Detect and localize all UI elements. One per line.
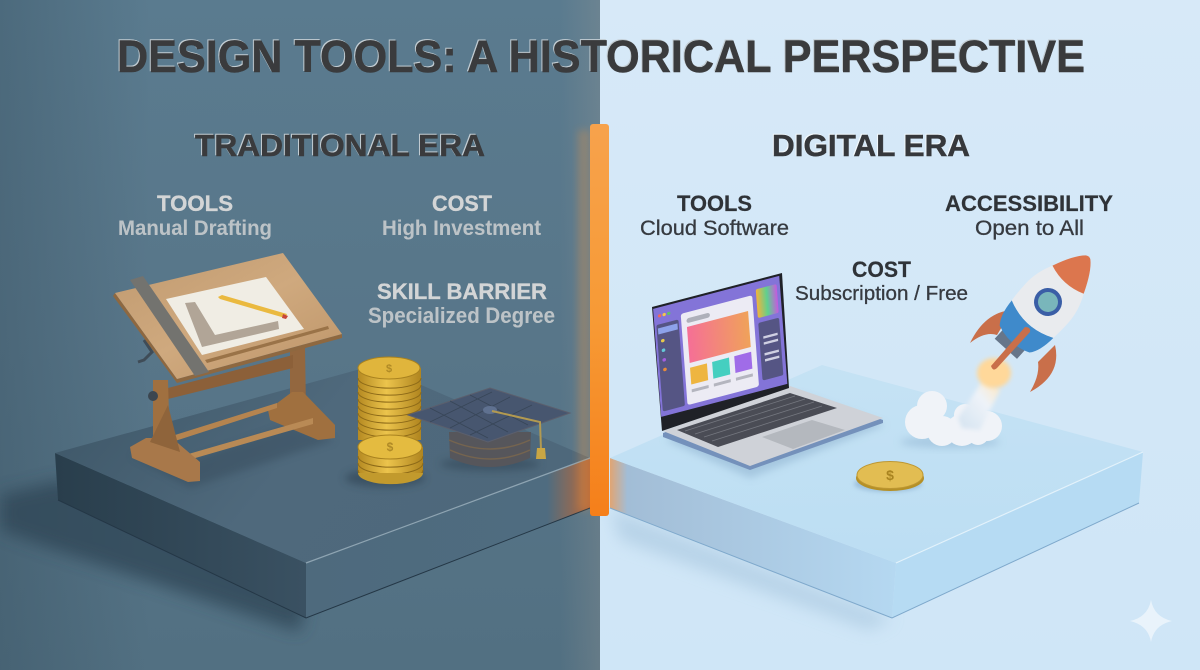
text block: traditional cost	[382, 191, 541, 240]
text block: traditional cost: High Investment	[382, 217, 541, 240]
icon: gold coin stacks	[345, 357, 425, 487]
text block: digital tools: TOOLS	[677, 191, 752, 216]
platform: traditional era	[0, 365, 590, 632]
heading: traditional era: TRADITIONAL ERA	[195, 128, 485, 163]
icon: gold coin stacks: $	[387, 440, 394, 454]
panel: digital era background	[600, 0, 1200, 670]
heading: digital era: DIGITAL ERA	[772, 128, 970, 163]
platform: digital era	[610, 365, 1143, 630]
icon: single gold coin	[854, 462, 924, 492]
exhaust cloud	[905, 391, 1002, 446]
text block: skill barrier: Specialized Degree	[368, 303, 555, 328]
icon: gold coin stacks: $	[386, 363, 392, 375]
text block: digital cost	[795, 257, 968, 305]
text block: accessibility: ACCESSIBILITY	[945, 191, 1113, 216]
text block: skill barrier	[368, 279, 555, 328]
title: DESIGN TOOLS: A HISTORICAL PERSPECTIVE	[117, 31, 1085, 82]
laptop screen UI	[653, 276, 787, 417]
text block: digital tools: Cloud Software	[640, 217, 789, 240]
icon: laptop	[652, 273, 885, 478]
icon: sparkle watermark	[1130, 600, 1172, 642]
icon: single gold coin: $	[886, 467, 894, 483]
text block: digital cost: Subscription / Free	[795, 283, 968, 305]
icon: graduation cap	[408, 388, 570, 471]
text block: traditional cost: COST	[432, 191, 493, 216]
text block: traditional tools: Manual Drafting	[118, 217, 272, 240]
text block: skill barrier: SKILL BARRIER	[377, 279, 547, 304]
icon: drafting table	[113, 253, 342, 488]
text block: digital tools	[640, 191, 789, 240]
icon: rising rocket with exhaust cloud	[900, 237, 1110, 448]
text block: accessibility: Open to All	[975, 217, 1084, 240]
divider: glowing orange bar	[578, 124, 609, 516]
text block: traditional tools	[118, 191, 272, 240]
text block: traditional tools: TOOLS	[157, 191, 233, 216]
text block: accessibility	[945, 191, 1113, 240]
panel: traditional era background	[0, 0, 600, 670]
text block: digital cost: COST	[852, 257, 912, 282]
